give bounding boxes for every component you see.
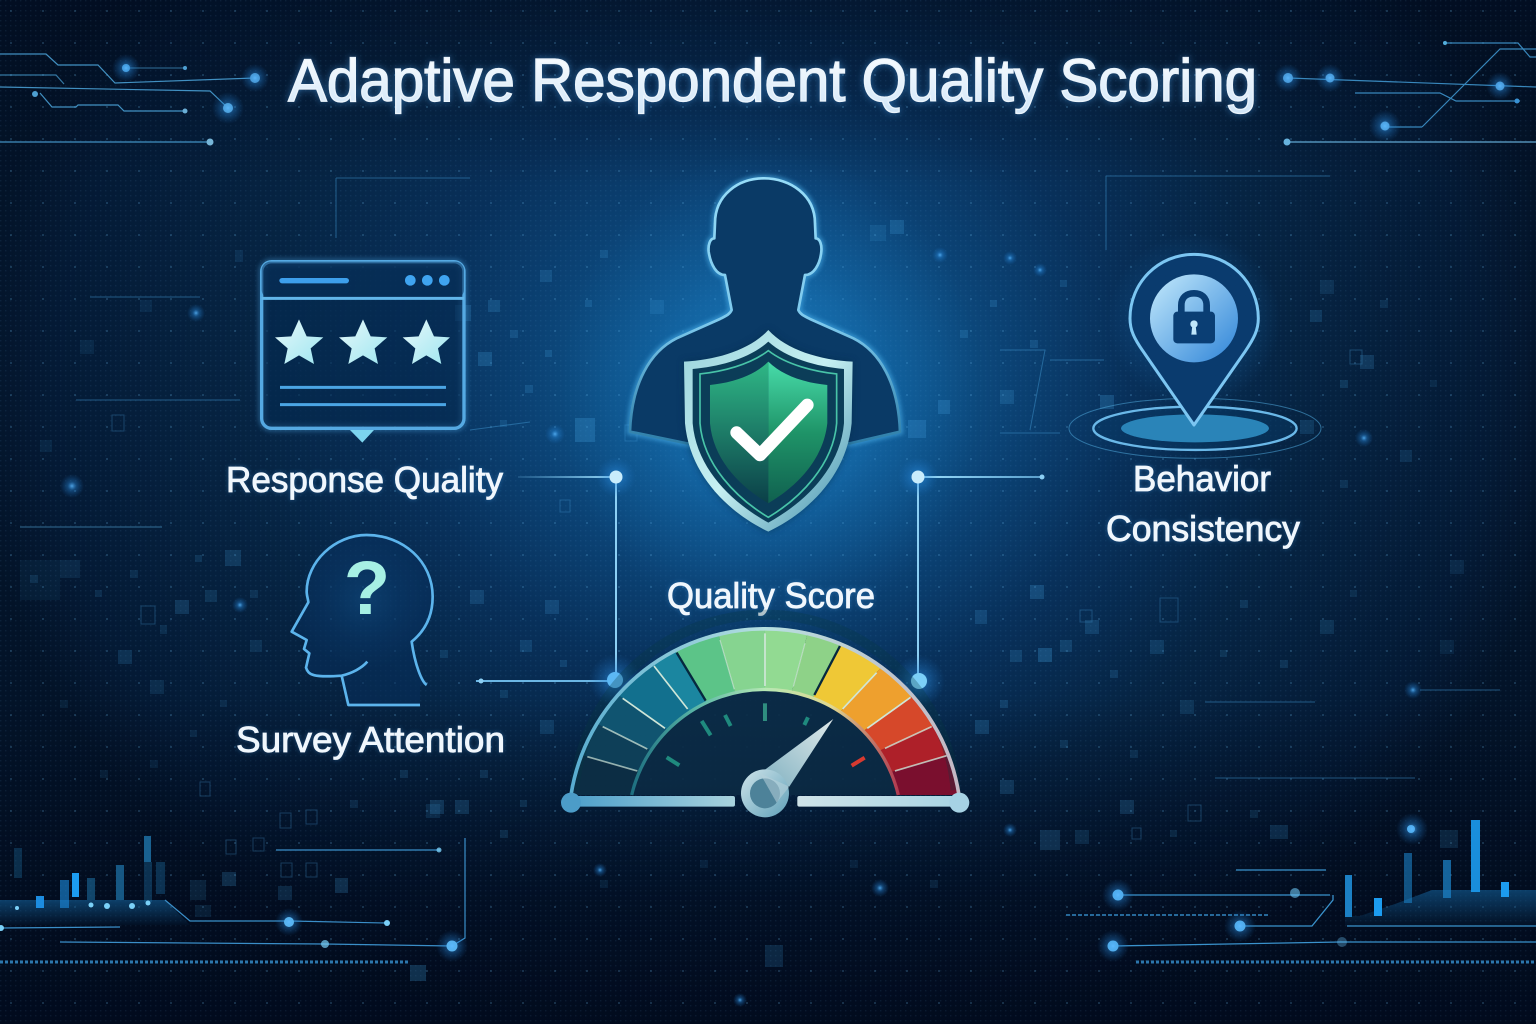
needle xyxy=(760,719,833,787)
label: behavior consistency: Consistency xyxy=(1106,508,1300,549)
circuit lines: mid background xyxy=(20,176,1500,778)
arc borders xyxy=(571,629,959,795)
title: Adaptive Respondent Quality Scoring xyxy=(288,47,1257,114)
question mark: ? xyxy=(344,546,390,631)
connector lines xyxy=(476,457,1044,707)
label: survey attention: Survey Attention xyxy=(236,719,505,760)
tick dividers xyxy=(587,633,947,771)
icon: person silhouette with shield xyxy=(630,178,900,532)
shield xyxy=(684,330,853,532)
central glow behind person xyxy=(560,150,980,630)
inner dial ticks xyxy=(667,703,865,766)
dial face xyxy=(571,629,959,795)
background outlined squares xyxy=(112,350,1362,877)
icon: location pin with lock xyxy=(1069,233,1321,458)
dark outer band xyxy=(574,615,956,790)
label: behavior consistency xyxy=(1106,458,1300,549)
label: quality score: Quality Score xyxy=(667,575,875,616)
label: behavior consistency: Behavior xyxy=(1133,458,1271,499)
label: response quality: Response Quality xyxy=(226,459,503,500)
circuit lines: top left xyxy=(0,54,260,146)
scale base bars xyxy=(572,796,735,807)
check mark xyxy=(737,405,807,455)
background data squares xyxy=(20,220,1464,981)
needle hub xyxy=(741,769,789,817)
icon: response rating window xyxy=(262,262,464,443)
bar charts and circuit lines: bottom left xyxy=(0,836,465,962)
icon: head with question mark xyxy=(292,530,435,705)
circuit lines: top right xyxy=(1283,41,1536,146)
gauge: quality score xyxy=(561,615,969,817)
lock xyxy=(1173,293,1215,343)
gauge segments xyxy=(571,628,959,795)
stars xyxy=(275,319,450,364)
bar charts and circuit lines: bottom right xyxy=(1066,820,1536,962)
person silhouette xyxy=(630,178,900,443)
